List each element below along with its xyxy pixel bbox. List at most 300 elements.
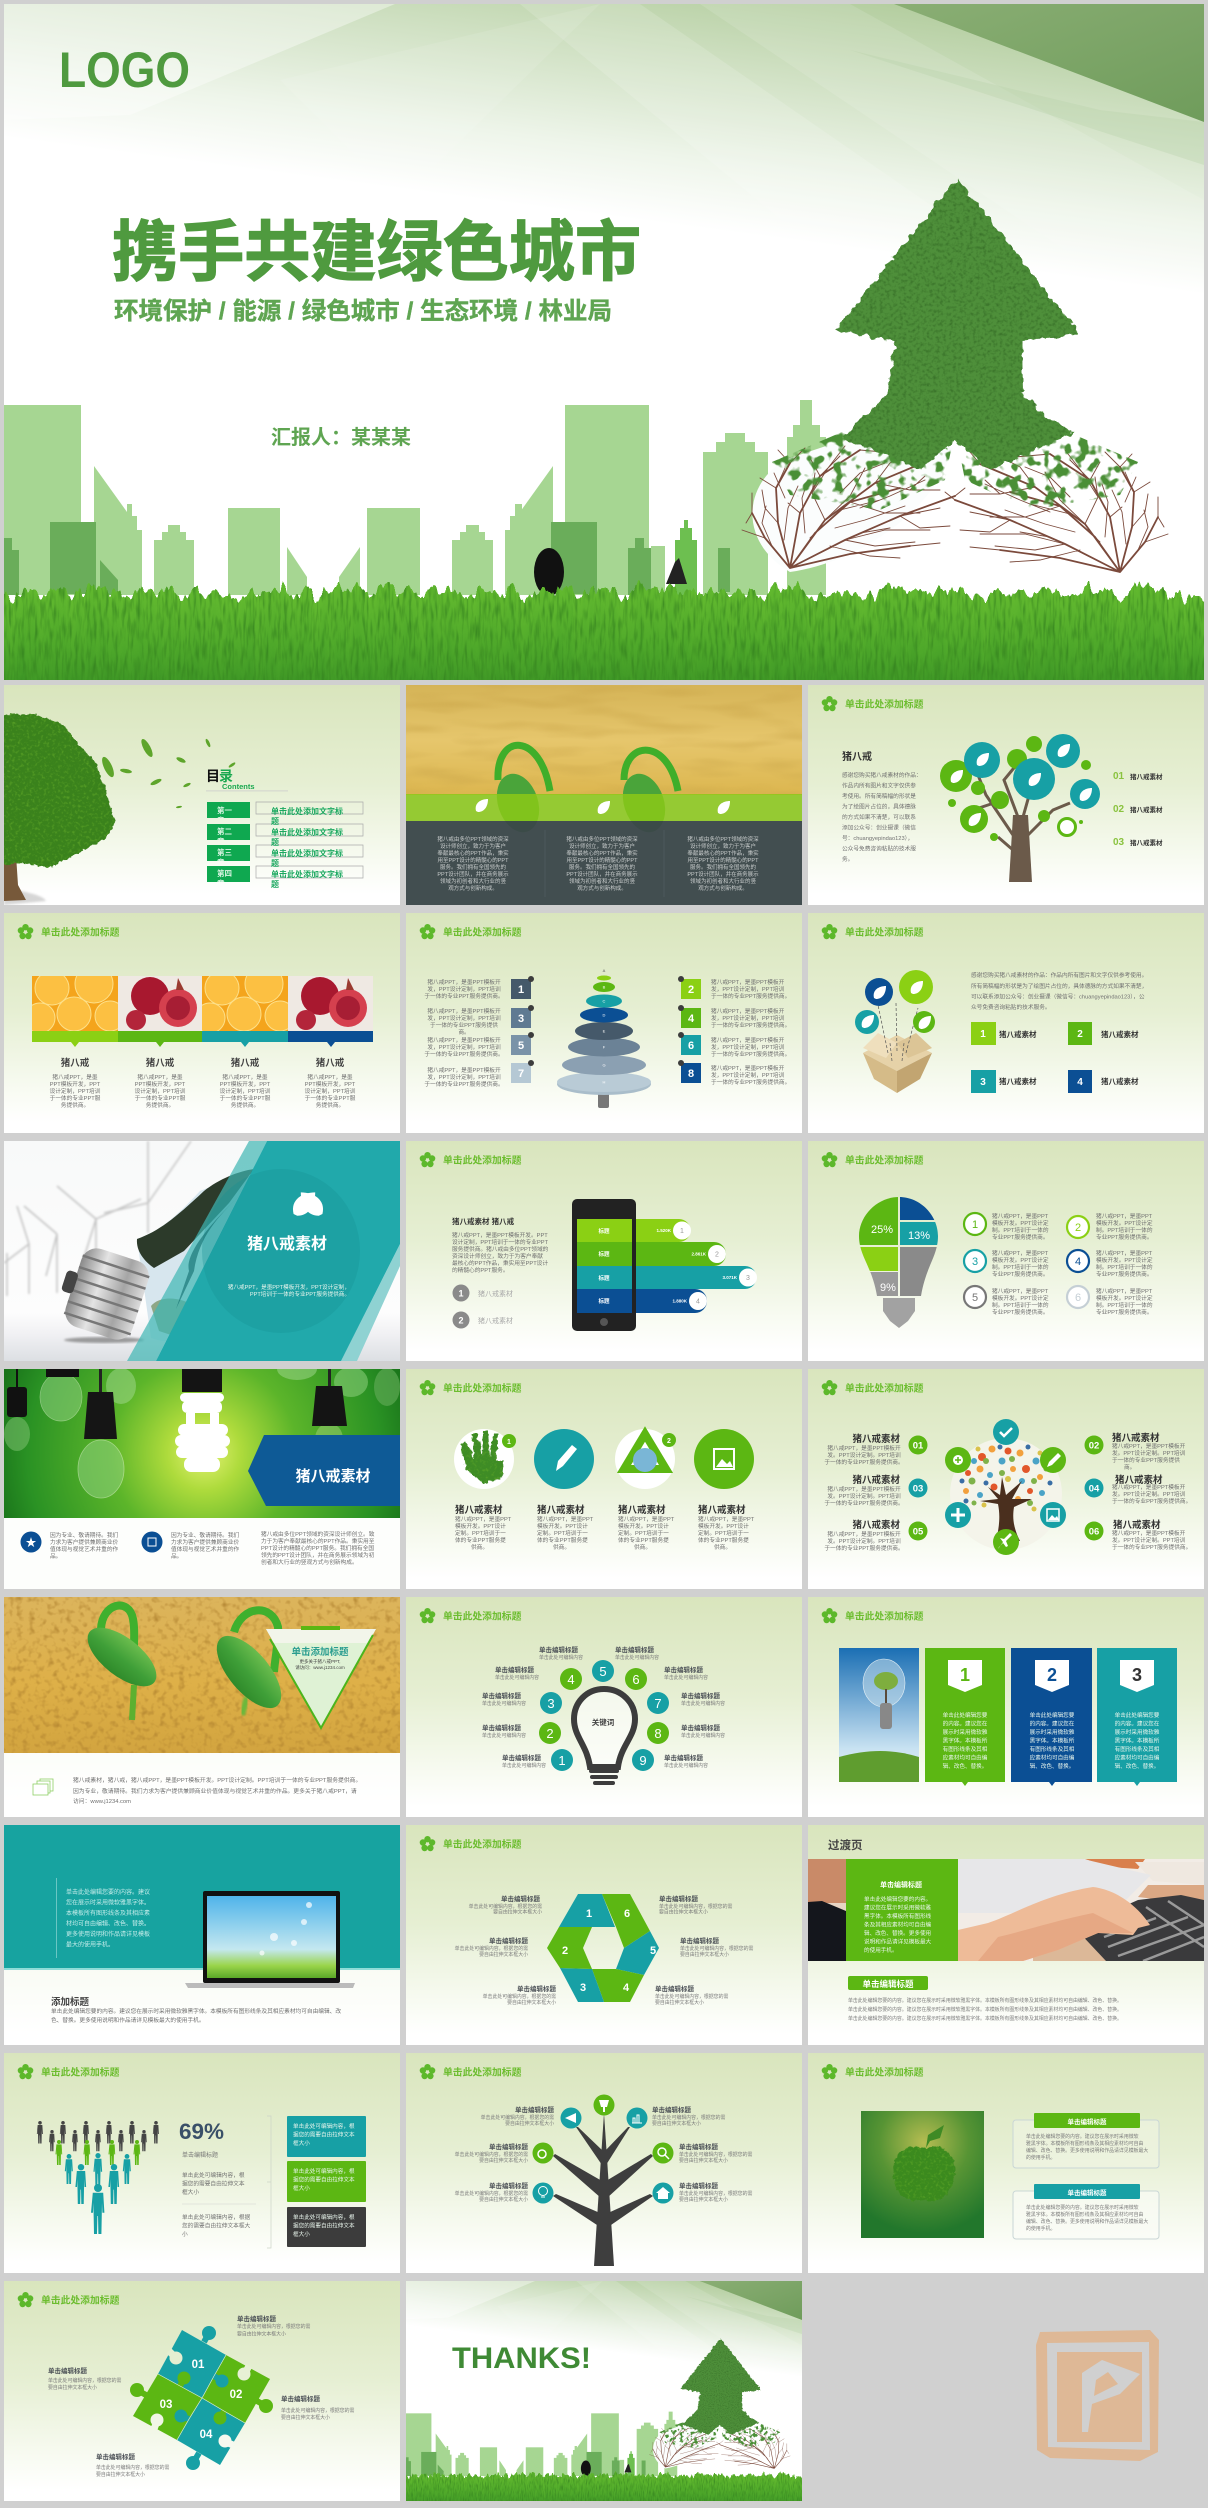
dark text band: 服务。我们拥有全国领先的 xyxy=(569,863,635,871)
columns of text: 猪八戒PPT，是墨 xyxy=(222,1073,268,1081)
number badges: 04 xyxy=(1089,1484,1100,1494)
teal block xyxy=(4,1825,400,1970)
right labels: 单击此处可编辑内容，根据您的需 xyxy=(679,2190,752,2197)
right labels: 单击编辑标题 xyxy=(680,1936,720,1945)
description text: 猪八戒PPT，是墨PPT模板开发。PPT xyxy=(452,1231,548,1239)
slide header: 单击此处添加标题 xyxy=(845,1610,924,1622)
right column text: 于一体的专业PPT服务提供商。 xyxy=(711,1078,790,1086)
text card 1: 编辑、改色、替换。更多使用说明和作品请详见模板最大 xyxy=(1026,2147,1148,2154)
left labels: 要自由拉伸文本框大小 xyxy=(493,1908,542,1916)
slide header xyxy=(18,924,120,939)
text card 1: 雅黑字体。本模板所有图形线条及其相应素材均可自由 xyxy=(1026,2140,1143,2147)
right text blocks: 发。PPT设计定制。PPT培训 xyxy=(1112,1536,1186,1544)
bulb pie chart: 9% xyxy=(880,1282,896,1294)
slide header: 单击此处添加标题 xyxy=(845,926,924,938)
petal labels: 单击此处可编辑内容 xyxy=(502,1762,546,1769)
left labels: 单击编辑标题 xyxy=(489,2142,528,2151)
slide header xyxy=(420,1380,522,1395)
panel: contents slide xyxy=(0,685,400,905)
legend text: 猪八戒PPT，是墨PPT xyxy=(1096,1287,1153,1295)
petal labels: 单击编辑标题 xyxy=(482,1723,522,1732)
legend text xyxy=(992,1212,1153,1316)
card 3: 3 xyxy=(1132,1665,1142,1685)
colored bars xyxy=(32,1031,373,1047)
columns of text: PPT模板开发，PPT xyxy=(135,1080,186,1088)
contents item chips: 第三 xyxy=(217,847,232,857)
panel: laptop slide xyxy=(4,1825,400,2045)
contents item chips: 章 xyxy=(217,857,225,867)
right labels: 单击此处可编辑内容，根据您的需 xyxy=(652,2114,725,2121)
petal labels: 单击此处可编辑内容 xyxy=(539,1654,583,1661)
slide header xyxy=(822,2064,924,2079)
intro text xyxy=(842,750,922,863)
stat notes: 据您的需要自由拉伸文本 xyxy=(182,2180,245,2188)
dark text band: 用至PPT设计的精髓心的PPT xyxy=(438,856,509,864)
left labels xyxy=(455,1894,556,2006)
numbered rings xyxy=(964,1213,1089,1308)
left text blocks: 发。PPT设计定制。PPT培训 xyxy=(827,1492,901,1500)
left label: 要自由拉伸文本框大小 xyxy=(48,2384,97,2391)
legend text: 专业PPT服务提供商。 xyxy=(1096,1308,1153,1316)
left column text: 发，PPT设计定制，PPT培训 xyxy=(427,1043,501,1051)
intro text: 号：chuangyepindao123）， xyxy=(842,835,913,842)
right text blocks: 商。 xyxy=(1124,1463,1135,1471)
contents heading xyxy=(206,768,288,791)
petal labels: 单击编辑标题 xyxy=(495,1665,534,1674)
left label: 单击此处可编辑内容，根据您的需 xyxy=(48,2377,121,2384)
left column text: 于一体的专业PPT服务提供商。 xyxy=(424,992,504,1000)
left column text: 发，PPT设计定制，PPT培训 xyxy=(427,1073,501,1081)
left text blocks: 发。PPT设计定制。PPT培训 xyxy=(827,1537,901,1545)
left column text: 猪八戒PPT，是墨PPT模板开 xyxy=(427,1036,501,1044)
section heading and text xyxy=(51,1996,341,2024)
intro text: 的方式如果不清楚，可以联系 xyxy=(842,813,916,821)
horizontal bars: 2.861K xyxy=(691,1252,707,1256)
text card 2: 雅黑字体。本模板所有图形线条及其相应素材均可自由 xyxy=(1026,2211,1143,2218)
green text panel: 黑字体。本模板所有图形线 xyxy=(864,1912,932,1920)
left labels: 要自由拉伸文本框大小 xyxy=(507,1999,556,2006)
columns of text: 务提供商。 xyxy=(146,1101,174,1109)
right column text xyxy=(711,978,790,1086)
right labels: 要自由拉伸文本框大小 xyxy=(659,1908,708,1916)
icon: picture circle xyxy=(694,1429,754,1489)
legend text: 模板开发。PPT设计定 xyxy=(992,1256,1049,1264)
right column text: 发，PPT设计定制，PPT培训 xyxy=(711,1014,785,1022)
right text blocks: 于一体的专业PPT服务提供 xyxy=(1112,1456,1180,1464)
tree icon ring xyxy=(945,1419,1066,1555)
petal labels: 单击编辑标题 xyxy=(664,1665,704,1674)
right text blocks xyxy=(1112,1432,1191,1551)
text card 2 xyxy=(1013,2184,1159,2239)
callout boxes: 据您的需要自由拉伸文本 xyxy=(293,2130,355,2138)
phone xyxy=(572,1199,636,1331)
card 3: 展示时采用微软雅 xyxy=(1115,1728,1160,1736)
numbered petals: 9 xyxy=(639,1753,647,1768)
bottom label xyxy=(96,2452,169,2478)
numbered petals: 8 xyxy=(654,1726,662,1741)
card 3 xyxy=(1097,1648,1177,1786)
panel: transition slide xyxy=(808,1825,1204,2045)
right labels: 单击编辑标题 xyxy=(655,1984,694,1993)
panel: jigsaw slide xyxy=(4,2281,400,2501)
numbered tiles: 1 xyxy=(980,1029,986,1040)
stat notes xyxy=(182,2116,271,2248)
contents item titles: 单击此处添加文字标 xyxy=(271,869,343,879)
green text panel: 的使用手机。 xyxy=(864,1946,898,1954)
right number tiles: 8 xyxy=(688,1068,694,1080)
keyboard photo xyxy=(808,1859,1204,1961)
callout boxes: 单击此处可编辑内容，根 xyxy=(293,2213,355,2221)
right text blocks: 猪八戒素材 xyxy=(1115,1474,1163,1486)
callout boxes xyxy=(287,2116,366,2247)
right text blocks: 发。PPT设计定制。PPT培训 xyxy=(1112,1449,1186,1457)
callout boxes: 单击此处可编辑内容，根 xyxy=(293,2167,355,2175)
laptop xyxy=(185,1891,355,1988)
contents heading: 目 xyxy=(206,768,220,784)
contents item titles: 单击此处添加文字标 xyxy=(271,806,343,816)
panel: icon tree slide xyxy=(808,685,1204,905)
left labels: 要自由拉伸文本框大小 xyxy=(479,2157,528,2164)
column text: 定制。PPT培训于一 xyxy=(618,1529,669,1537)
slide header: 单击此处添加标题 xyxy=(443,926,522,938)
number badges xyxy=(908,1436,1104,1540)
number badges: 02 xyxy=(1089,1440,1099,1452)
intro paragraph: 感谢您购买猪八戒素材的作品：作品内所有图片和文字仅供参考使用。 xyxy=(971,971,1147,979)
left text blocks: 发。PPT设计定制。PPT培训 xyxy=(827,1451,901,1459)
bulb pie chart xyxy=(858,1196,940,1328)
green text panel: 条及其相应素材均可自由编 xyxy=(864,1920,932,1928)
teal block text: 最大的使用手机。 xyxy=(66,1940,114,1948)
bottom label: 要自由拉伸文本框大小 xyxy=(96,2471,145,2478)
green bulbs photo xyxy=(4,1358,400,1519)
left text blocks xyxy=(824,1433,904,1552)
contents item titles: 题 xyxy=(271,880,279,889)
card 2 xyxy=(1011,1648,1092,1786)
caption text: 因为专业，敬请期待。我们力求为客户提供兼顾商业价值体现与视觉艺术并重的作品。更多关于猪八戒PPT，请 xyxy=(73,1787,357,1795)
legend text: 专业PPT服务提供商。 xyxy=(992,1308,1049,1316)
legend text: 制。PPT培训于一体的 xyxy=(1096,1301,1153,1309)
column text: 模板开发。PPT设计 xyxy=(455,1522,506,1530)
tree labels: 猪八戒素材 xyxy=(1130,838,1163,847)
inverted triangle callout: 更多关于猪八戒PPT, xyxy=(299,1658,341,1665)
numbered petals: 4 xyxy=(567,1672,575,1687)
panel: hanging bulbs slide xyxy=(4,1358,400,1589)
numbered tiles: 猪八戒素材 xyxy=(999,1029,1037,1039)
lower text columns xyxy=(50,1530,375,1566)
green text panel: 辑、改色、替换。更多使用 xyxy=(864,1929,931,1937)
left text blocks: 猪八戒PPT，是墨PPT模板开 xyxy=(827,1485,901,1493)
numbered tiles: 猪八戒素材 xyxy=(1101,1029,1139,1039)
dark text band: 设计师创立，致力于为客户 xyxy=(690,842,756,850)
legend text: 制。PPT培训于一体的 xyxy=(992,1226,1049,1234)
left column text: 猪八戒PPT，是墨PPT模板开 xyxy=(427,1007,501,1015)
legend text: 猪八戒PPT，是墨PPT xyxy=(1096,1249,1153,1257)
intro text: 添加公众号：创业摄课（微信 xyxy=(842,824,916,832)
column text: 模板开发。PPT设计 xyxy=(618,1522,669,1530)
card 2: 的内容。建议您在 xyxy=(1030,1720,1075,1728)
dark text band: PPT设计团队，并在商务展示 xyxy=(566,870,638,878)
petal labels: 单击此处可编辑内容 xyxy=(664,1674,708,1681)
lower text columns: 领先的PPT设计团队，并在商务展示领域为初 xyxy=(261,1551,375,1559)
column text: 猪八戒素材 xyxy=(455,1504,503,1516)
contents item titles: 单击此处添加文字标 xyxy=(271,848,343,858)
hexagon ribbon: 2 xyxy=(562,1945,568,1957)
right label xyxy=(281,2394,354,2421)
right column text: 发，PPT设计定制，PPT培训 xyxy=(711,1043,785,1051)
left column text: 猪八戒PPT，是墨PPT模板开 xyxy=(427,1066,501,1074)
tree labels xyxy=(1113,771,1163,848)
panel caption: PPT培训于一体的专业PPT服务提供商。 xyxy=(250,1290,350,1298)
left text blocks: 猪八戒素材 xyxy=(852,1519,900,1531)
slide header: 单击此处添加标题 xyxy=(443,2066,522,2078)
text card 1: 的使用手机。 xyxy=(1026,2154,1055,2161)
lower text columns: PPT设计的精髓心的PPT服务。我们拥有全国 xyxy=(261,1544,374,1552)
lower text columns: 值体现与视觉艺术并重的作 xyxy=(50,1545,119,1553)
right column text: 发，PPT设计定制，PPT培训 xyxy=(711,985,785,993)
right labels: 要自由拉伸文本框大小 xyxy=(679,2157,728,2164)
dark text band: 服务。我们拥有全国领先的 xyxy=(690,863,756,871)
contents item chips: 第一 xyxy=(217,805,232,815)
petal labels: 单击编辑标题 xyxy=(502,1753,542,1762)
green text panel: 说明和作品请详见模板最大 xyxy=(864,1938,932,1946)
left column text: 发，PPT设计定制，PPT培训 xyxy=(427,985,501,993)
numbered list xyxy=(452,1284,513,1328)
column text: 模板开发。PPT设计 xyxy=(698,1522,749,1530)
lower text columns: 力求为客户提供兼顾商业价 xyxy=(171,1538,240,1546)
sprouts xyxy=(78,1606,293,1720)
columns of text: 猪八戒PPT，是墨 xyxy=(307,1073,353,1081)
intro text: 公众号免费咨询粘贴的技术服 xyxy=(842,844,916,852)
wheat field photo xyxy=(406,685,802,795)
card 1 xyxy=(925,1648,1005,1786)
petal labels: 单击编辑标题 xyxy=(664,1753,704,1762)
columns of text: 设计定制，PPT培训 xyxy=(305,1087,356,1095)
number badges: 03 xyxy=(913,1484,923,1494)
card 1: 黑字体。本模板所 xyxy=(943,1736,988,1744)
right column text: 猪八戒PPT，是墨PPT模板开 xyxy=(711,1036,785,1044)
horizontal bars: 4 xyxy=(696,1298,700,1306)
column text: 模板开发。PPT设计 xyxy=(537,1522,588,1530)
right label: 单击编辑标题 xyxy=(281,2394,320,2403)
right text blocks: 发。PPT设计定制。PPT培训 xyxy=(1112,1490,1186,1498)
column text: 定制。PPT培训于一 xyxy=(698,1529,749,1537)
card 1: 的内容。建议您在 xyxy=(943,1720,988,1728)
sky bulb photo xyxy=(839,1648,919,1782)
panel: cardboard box slide xyxy=(808,913,1204,1133)
left labels: 单击编辑标题 xyxy=(515,2105,554,2114)
phone: 标题 xyxy=(598,1274,610,1282)
stacked ellipses tree xyxy=(557,968,651,1108)
slide header: 单击此处添加标题 xyxy=(41,2294,120,2306)
lower text columns: 品。 xyxy=(171,1553,182,1560)
numbered tiles: 猪八戒素材 xyxy=(999,1076,1037,1086)
slide header xyxy=(822,1608,924,1623)
column text: 定制。PPT培训于一 xyxy=(455,1529,506,1537)
petal labels: 单击编辑标题 xyxy=(681,1723,720,1732)
left labels: 要自由拉伸文本框大小 xyxy=(505,2120,554,2127)
right labels: 要自由拉伸文本框大小 xyxy=(655,1999,704,2006)
legend text: 专业PPT服务提供商。 xyxy=(1096,1233,1153,1241)
contents item titles: 题 xyxy=(271,859,279,868)
cover title: 携手共建绿色城市 xyxy=(112,215,641,289)
legend text: 专业PPT服务提供商。 xyxy=(992,1270,1049,1278)
legend text: 制。PPT培训于一体的 xyxy=(992,1301,1049,1309)
navy title arrow: 猪八戒素材 xyxy=(295,1467,371,1485)
numbered rings: 6 xyxy=(1075,1292,1081,1304)
right labels: 单击此处可编辑内容，根据您的需 xyxy=(680,1945,753,1952)
left column text: 商。 xyxy=(458,1028,470,1036)
card 1: 有图形线条及其相 xyxy=(943,1745,988,1753)
columns of text: 猪八戒 xyxy=(146,1057,175,1069)
dark text band: 设计师创立，致力于为客户 xyxy=(440,842,506,850)
left column text: 发，PPT设计定制，PPT培训 xyxy=(427,1014,501,1022)
petal labels: 单击编辑标题 xyxy=(681,1691,720,1700)
numbered rings: 2 xyxy=(1075,1222,1081,1234)
logo: LOGO xyxy=(59,42,190,98)
right text blocks: 猪八戒PPT，是墨PPT模板开 xyxy=(1112,1483,1186,1491)
inverted triangle callout: 单击添加标题 xyxy=(291,1646,349,1658)
caption text: 访问：www.j1234.com xyxy=(73,1797,131,1805)
slide header xyxy=(822,696,924,711)
petal labels: 单击此处可编辑内容 xyxy=(681,1700,725,1707)
columns of text: 设计定制，PPT培训 xyxy=(50,1087,101,1095)
left column text: 于一体的专业PPT服务提供商。 xyxy=(424,1050,504,1058)
right column text: 猪八戒PPT，是墨PPT模板开 xyxy=(711,1007,785,1015)
right column text: 发，PPT设计定制，PPT培训 xyxy=(711,1071,785,1079)
green text panel xyxy=(846,1859,958,1961)
slide header: 单击此处添加标题 xyxy=(443,1610,522,1622)
slide header: 单击此处添加标题 xyxy=(41,926,120,938)
dark text band xyxy=(406,821,802,905)
numbered tiles: 猪八戒素材 xyxy=(1101,1076,1139,1086)
right labels: 要自由拉伸文本框大小 xyxy=(679,2196,728,2203)
photo strip xyxy=(32,976,373,1031)
slide header: 单击此处添加标题 xyxy=(845,1382,924,1394)
column text: 供商。 xyxy=(714,1543,731,1551)
numbered list: 猪八戒素材 xyxy=(478,1289,513,1298)
stacked ellipses tree: C xyxy=(603,998,606,1004)
number badges: 05 xyxy=(913,1526,924,1538)
lower paragraph: 单击此处编辑您要的内容。建议您在展示时采用微软雅黑字体。本模板所有图形线条及其相应素材均可自由编辑、改色、替换。 xyxy=(848,2015,1122,2022)
panel: hexagon cycle slide xyxy=(406,1825,802,2045)
panel: phone bar chart slide xyxy=(406,1141,802,1361)
column text: 供商。 xyxy=(471,1543,488,1551)
dark text band: 猪八戒由多位PPT领域的资深 xyxy=(687,835,759,843)
column text: 猪八戒PPT，是墨PPT xyxy=(698,1515,755,1523)
slide header xyxy=(18,2292,120,2307)
right labels: 要自由拉伸文本框大小 xyxy=(652,2120,701,2127)
phone: 标题 xyxy=(598,1297,610,1305)
contents heading: Contents xyxy=(222,782,254,791)
bottom label: 单击此处可编辑内容，根据您的需 xyxy=(96,2464,169,2471)
column text xyxy=(455,1504,755,1551)
green title button: 单击编辑标题 xyxy=(862,1979,914,1989)
hexagon ribbon: 3 xyxy=(580,1982,586,1994)
infographic tree xyxy=(940,734,1100,882)
right column text: 猪八戒PPT，是墨PPT模板开 xyxy=(711,978,785,986)
card 3: 单击此处编辑您要 xyxy=(1115,1711,1160,1719)
box with floating icons xyxy=(855,970,935,1093)
numbered list: 2 xyxy=(458,1316,464,1326)
right labels: 单击编辑标题 xyxy=(679,2142,718,2151)
dark text band: 猪八戒由多位PPT领域的资深 xyxy=(437,835,509,843)
right number tiles: 4 xyxy=(688,1013,695,1025)
text card 1 xyxy=(1013,2113,1159,2168)
card 3: 辑、改色、替换。 xyxy=(1115,1762,1159,1770)
left text blocks: 猪八戒素材 xyxy=(852,1433,900,1445)
jigsaw puzzle: 02 xyxy=(230,2389,242,2401)
contents item titles: 题 xyxy=(271,817,279,826)
slide header xyxy=(420,1608,522,1623)
number badges: 01 xyxy=(913,1440,924,1452)
icon: recycle globe circle: 2 xyxy=(667,1438,671,1445)
panel: three column cards slide xyxy=(808,1597,1204,1817)
column text: 定制。PPT培训于一 xyxy=(537,1529,588,1537)
left labels: 单击编辑标题 xyxy=(489,1936,528,1945)
icon: recycle globe circle xyxy=(615,1429,676,1489)
jigsaw puzzle xyxy=(130,2326,273,2470)
teal block text: 您在展示时采用微软雅黑字体。 xyxy=(66,1898,150,1906)
right column text: 于一体的专业PPT服务提供商。 xyxy=(711,1050,790,1058)
panel: fruit photo slide xyxy=(4,913,400,1133)
icon: documents xyxy=(33,1779,53,1795)
teal diagonal panel xyxy=(127,1141,400,1361)
right labels xyxy=(652,2105,752,2203)
stacked ellipses tree: A xyxy=(603,968,606,973)
text card 2: 编辑、改色、替换。更多使用说明和作品请详见模板最大 xyxy=(1026,2218,1148,2225)
icon: star badge: ★ xyxy=(26,1537,36,1549)
lower text columns: 品。 xyxy=(50,1553,61,1560)
right labels: 要自由拉伸文本框大小 xyxy=(680,1951,729,1958)
panel: branching tree slide xyxy=(406,2053,802,2273)
description text: 的精髓心的PPT服务。 xyxy=(452,1266,509,1274)
icon: pencil circle xyxy=(534,1429,594,1489)
petal labels: 单击此处可编辑内容 xyxy=(615,1654,659,1661)
petal labels: 单击编辑标题 xyxy=(539,1645,578,1654)
numbered petals: 6 xyxy=(632,1672,640,1687)
petal labels xyxy=(482,1645,725,1769)
lower text columns: 因为专业、敬请期待。我们 xyxy=(171,1531,240,1539)
dark text band: 奉献最核心的PPT作品，秉实 xyxy=(687,849,759,857)
hexagon ribbon: 6 xyxy=(624,1908,630,1920)
left text blocks: 猪八戒PPT，是墨PPT模板开 xyxy=(827,1530,901,1538)
dark text band: 领域为初创者和大行业的竖 xyxy=(440,877,506,885)
slide header xyxy=(420,1152,522,1167)
slide header: 单击此处添加标题 xyxy=(845,2066,924,2078)
handprint tree xyxy=(950,1438,1062,1550)
numbered rings: 3 xyxy=(972,1256,978,1268)
panel: wind energy bulb slide xyxy=(4,1141,400,1361)
stat notes: 小 xyxy=(182,2230,188,2238)
dark text band: PPT设计团队，并在商务展示 xyxy=(687,870,759,878)
wind turbines xyxy=(4,1141,191,1296)
column text: 猪八戒素材 xyxy=(537,1504,585,1516)
horizontal bars: 3 xyxy=(746,1275,750,1282)
description text xyxy=(452,1216,549,1274)
panel: seed photo slide xyxy=(4,1597,400,1817)
columns of text: 务提供商。 xyxy=(61,1101,89,1109)
horizontal bars: 1 xyxy=(680,1228,684,1235)
horizontal bars: 1.520K xyxy=(656,1228,672,1233)
slide header: 单击此处添加标题 xyxy=(845,1154,924,1166)
green title button xyxy=(848,1976,928,1990)
lower text columns: 力于为客户奉献最核心的PPT作品。秉实用至 xyxy=(261,1537,375,1545)
card 2: 辑、改色、替换。 xyxy=(1030,1762,1074,1770)
legend text: 制。PPT培训于一体的 xyxy=(992,1263,1049,1271)
tree labels: 03 xyxy=(1113,837,1125,848)
caption text: 猪八戒素材，猪八戒，猪八戒PPT，是墨PPT模板开发。PPT设计定制。PPT培训于一体的专业PPT服务提供商。 xyxy=(73,1776,361,1784)
column text: 猪八戒PPT，是墨PPT xyxy=(455,1515,512,1523)
